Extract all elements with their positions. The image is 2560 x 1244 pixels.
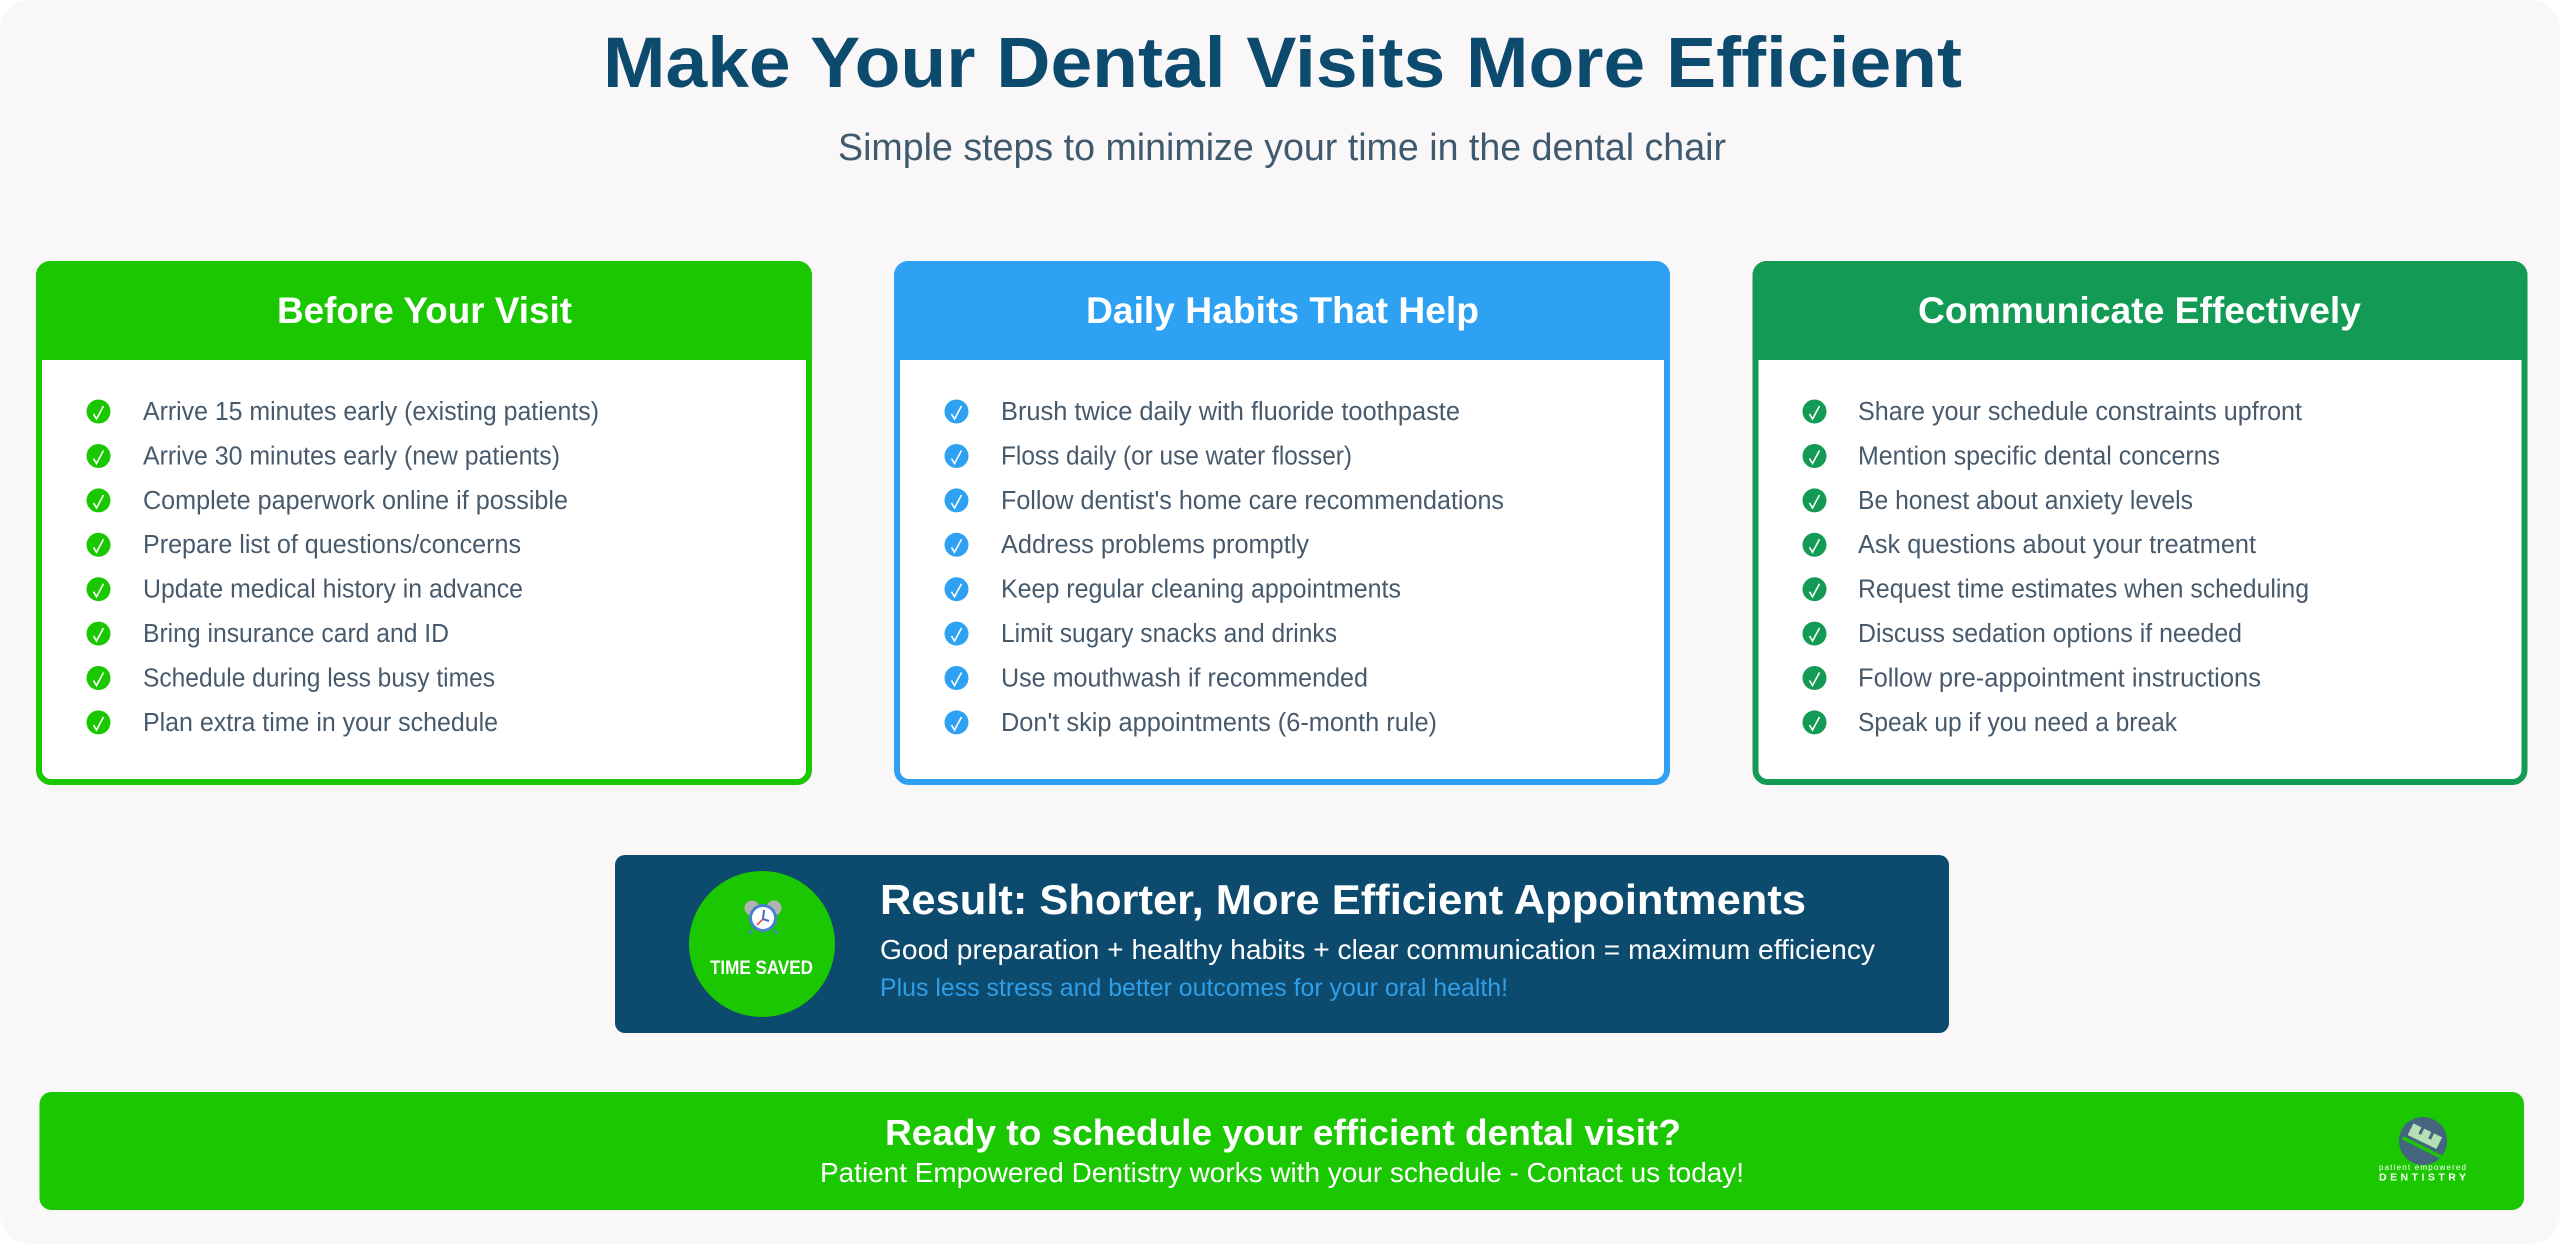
- checklist: before your visit: Complete paperwork online if possible: [143, 487, 568, 515]
- checklist: communicate: Speak up if you need a break: [1858, 709, 2177, 737]
- checklist: daily habits: Use mouthwash if recommended: [1001, 664, 1368, 692]
- checklist: communicate: Mention specific dental concerns: [1858, 442, 2220, 470]
- result note: Plus less stress and better outcomes for your oral health!: [880, 974, 1508, 1002]
- title: Make Your Dental Visits More Efficient: [603, 24, 1962, 103]
- cta heading: Ready to schedule your efficient dental visit?: [885, 1112, 1681, 1153]
- checklist: daily habits: Keep regular cleaning appointments: [1001, 576, 1401, 604]
- checklist: before your visit: Arrive 30 minutes early (new patients): [143, 442, 560, 470]
- checklist: communicate: Follow pre-appointment instructions: [1858, 664, 2261, 692]
- result banner: [615, 855, 1949, 1033]
- checklist: before your visit: Prepare list of questions/concerns: [143, 531, 521, 559]
- logo: patient empowered dentistry: DENTISTRY: [2379, 1172, 2466, 1184]
- checklist: communicate: Request time estimates when scheduling: [1858, 576, 2309, 604]
- checklist: daily habits: Address problems promptly: [1001, 531, 1309, 559]
- checklist: communicate: [1802, 398, 2309, 737]
- checklist: before your visit: Arrive 15 minutes early (existing patients): [143, 398, 599, 426]
- checklist: before your visit: Schedule during less busy times: [143, 664, 495, 692]
- result heading: Result: Shorter, More Efficient Appointments: [880, 876, 1806, 923]
- checklist: before your visit: Plan extra time in your schedule: [143, 709, 498, 737]
- cta text: Patient Empowered Dentistry works with your schedule - Contact us today!: [820, 1157, 1744, 1188]
- checklist: before your visit: [86, 398, 599, 737]
- panel: communicate effectively: [1752, 261, 2528, 782]
- heading: communicate: Communicate Effectively: [1918, 290, 2361, 331]
- panel header: daily habits: [894, 261, 1670, 360]
- time saved badge: [689, 871, 835, 1017]
- panel header: communicate: [1752, 261, 2528, 360]
- checklist: before your visit: Update medical history in advance: [143, 576, 523, 604]
- call to action banner: [40, 1092, 2524, 1210]
- checklist: before your visit: Bring insurance card and ID: [143, 620, 449, 648]
- checklist: communicate: Ask questions about your treatment: [1858, 531, 2256, 559]
- checklist: communicate: Be honest about anxiety levels: [1858, 487, 2193, 515]
- logo: patient empowered dentistry: patient empowered: [2379, 1163, 2466, 1172]
- checklist: daily habits: Don't skip appointments (6-month rule): [1001, 709, 1437, 737]
- heading: daily habits: Daily Habits That Help: [1086, 290, 1479, 331]
- checklist: daily habits: Floss daily (or use water flosser): [1001, 442, 1352, 470]
- panel: before your visit: [36, 261, 812, 782]
- checklist: communicate: Share your schedule constraints upfront: [1858, 398, 2302, 426]
- panel: daily habits that help: [894, 261, 1670, 782]
- icon: alarm clock: [744, 900, 782, 934]
- checklist: communicate: Discuss sedation options if needed: [1858, 620, 2242, 648]
- checklist: daily habits: Limit sugary snacks and drinks: [1001, 620, 1337, 648]
- heading: before your visit: Before Your Visit: [277, 290, 572, 331]
- checklist: daily habits: Follow dentist's home care recommendations: [1001, 487, 1504, 515]
- checklist: daily habits: [944, 398, 1504, 737]
- checklist: daily habits: Brush twice daily with fluoride toothpaste: [1001, 398, 1460, 426]
- logo: patient empowered dentistry: [2379, 1117, 2466, 1184]
- panel header: before your visit: [36, 261, 812, 360]
- badge label: TIME SAVED: [710, 958, 813, 979]
- result equation: Good preparation + healthy habits + clear communication = maximum efficiency: [880, 934, 1875, 965]
- subtitle: Simple steps to minimize your time in the dental chair: [838, 127, 1726, 169]
